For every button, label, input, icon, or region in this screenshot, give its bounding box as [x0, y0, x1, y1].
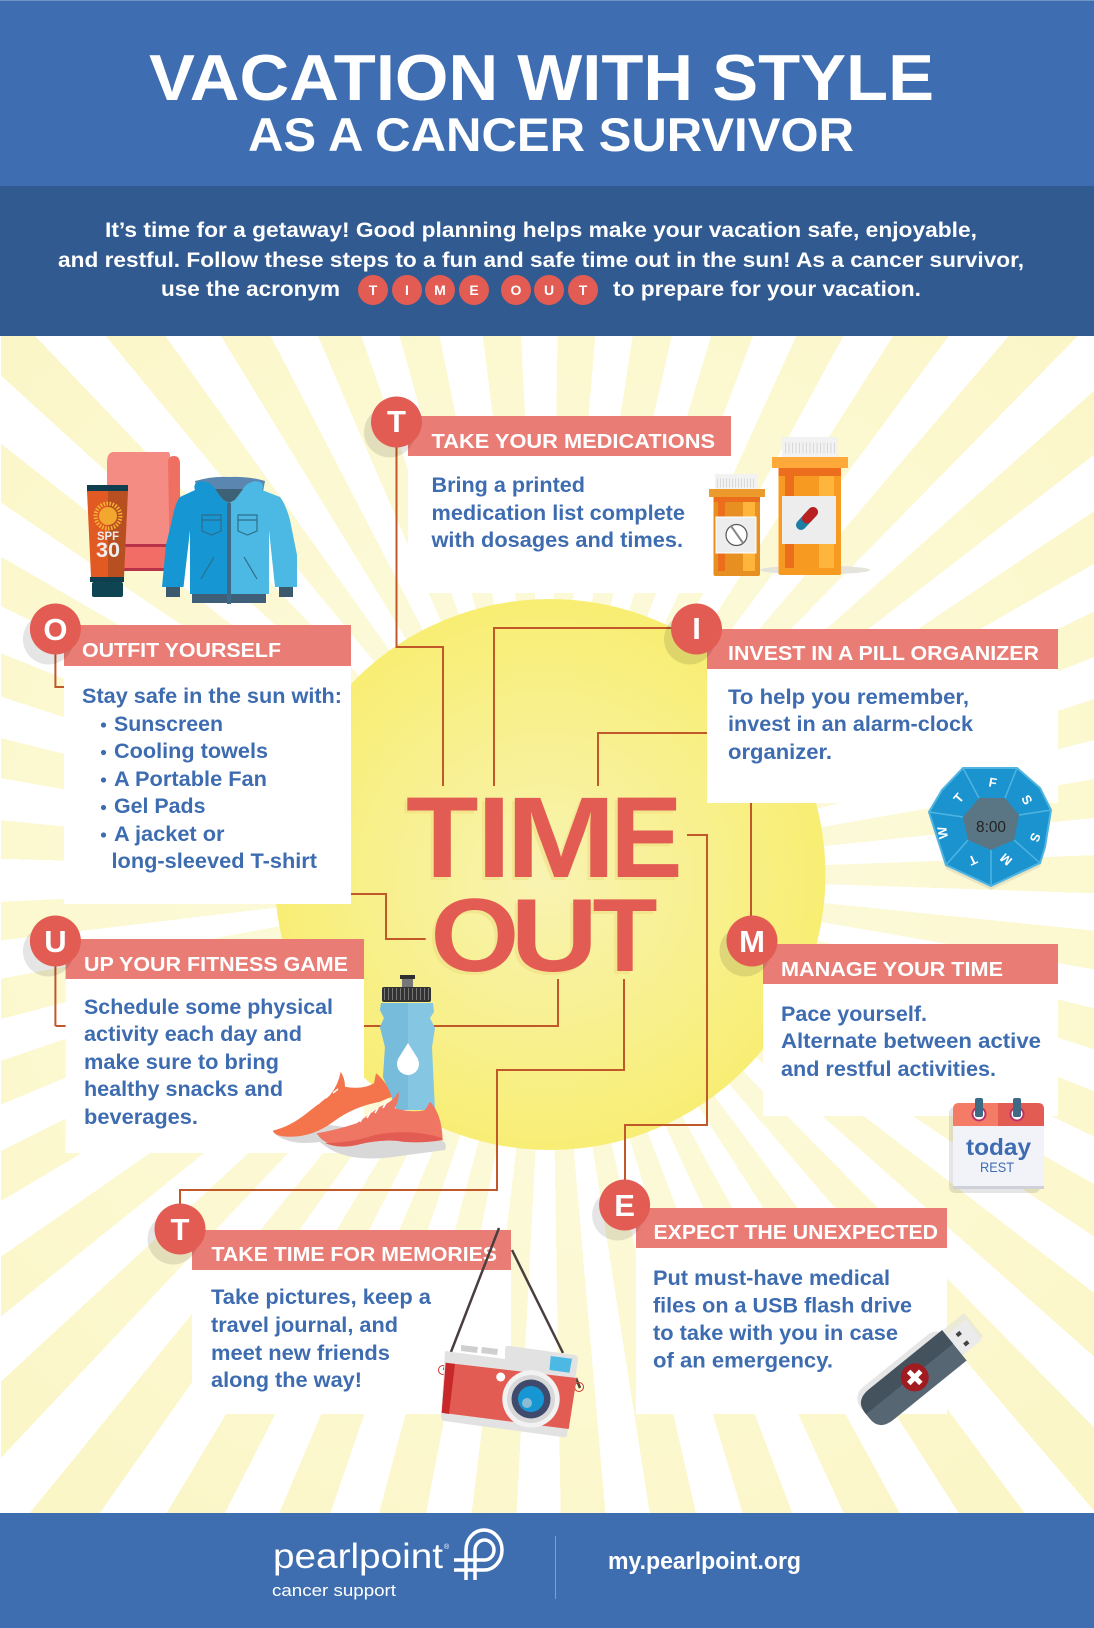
subtitle: AS A CANCER SURVIVOR [248, 108, 854, 161]
day labels [934, 774, 1044, 869]
icon: front shoe [317, 1092, 443, 1146]
headline text: E [610, 774, 682, 902]
body text: Bring a printed [432, 474, 585, 497]
logo wordmark: cancer support [272, 1581, 396, 1600]
body list [82, 685, 342, 873]
headline text: T [592, 878, 658, 994]
headline shadow: T [403, 777, 476, 905]
day labels: F [988, 774, 998, 791]
intro text: and restful. Follow these steps to a fun and safe time out in the sun! As a cancer survivor, [58, 249, 1024, 272]
icon: calendar: today [966, 1134, 1031, 1160]
day labels: S [1027, 831, 1044, 844]
body text: healthy snacks and [84, 1078, 283, 1101]
headline shadow: I [474, 777, 508, 905]
body text: travel journal, and [211, 1314, 398, 1337]
day labels: T [950, 790, 967, 806]
icon: USB drive [852, 1308, 988, 1431]
badge E [592, 1180, 650, 1240]
icon: calendar: REST [980, 1159, 1014, 1175]
body text [653, 1267, 912, 1372]
badge M: M [739, 924, 765, 959]
headline text: I [477, 774, 511, 902]
body text: and restful activities. [781, 1058, 996, 1081]
badge T [364, 396, 422, 458]
badge T: T [387, 404, 406, 439]
icon: camera [438, 1228, 584, 1437]
body text: Alternate between active [781, 1030, 1041, 1053]
heading: EXPECT THE UNEXPECTED [654, 1221, 938, 1244]
heading: TAKE TIME FOR MEMORIES [212, 1243, 497, 1266]
body text [211, 1286, 431, 1392]
body text: files on a USB flash drive [653, 1294, 912, 1318]
icon: calendar [949, 1098, 1044, 1193]
logo mark [454, 1530, 502, 1580]
day labels: W [934, 825, 951, 840]
headline shadow: M [503, 777, 613, 905]
acronym badges: M [434, 282, 446, 298]
icon: pill organizer [929, 768, 1051, 890]
headline shadow: T [590, 881, 654, 997]
badge T [148, 1204, 206, 1264]
logo wordmark [272, 1537, 450, 1600]
body text: along the way! [211, 1369, 362, 1392]
panel: up your fitness game [23, 916, 364, 1153]
icon: sunscreen tube [87, 485, 128, 597]
acronym badges: I [405, 282, 409, 298]
badge E: E [614, 1188, 635, 1223]
title: VACATION WITH STYLE [149, 41, 934, 114]
body text: with dosages and times. [430, 529, 683, 552]
icon: water bottle [380, 975, 435, 1110]
strap [444, 1228, 499, 1370]
panel: take your medications [364, 396, 731, 593]
panel: expect the unexpected [592, 1180, 947, 1414]
panel: outfit yourself [23, 604, 351, 904]
body text: activity each day and [84, 1023, 302, 1046]
body text: meet new friends [211, 1342, 390, 1365]
acronym badges: T [579, 282, 588, 298]
body text [781, 1003, 1041, 1081]
acronym badges: U [544, 282, 554, 298]
headline shadow: O [427, 881, 516, 997]
body text [728, 686, 973, 764]
panel: invest in a pill organizer [664, 604, 1058, 803]
website url: my.pearlpoint.org [608, 1548, 801, 1575]
headline text: O [430, 878, 519, 994]
body text: make sure to bring [84, 1051, 279, 1074]
icon: small bottle [709, 474, 765, 576]
body text: of an emergency. [653, 1350, 833, 1372]
body list: A jacket or [114, 823, 224, 846]
body list: A Portable Fan [114, 768, 267, 791]
intro text [58, 219, 1024, 301]
footer [0, 1513, 1094, 1628]
body text: Schedule some physical [84, 996, 333, 1019]
header banner [0, 0, 1094, 186]
intro text: use the acronym [161, 278, 340, 301]
acronym badges: O [511, 282, 522, 298]
body list: Stay safe in the sun with: [82, 685, 342, 708]
icon: water bottle and shoes [273, 975, 446, 1159]
headline text: U [510, 878, 598, 994]
TIME OUT headline [403, 774, 682, 997]
badge O: O [43, 612, 67, 647]
badge M [720, 916, 778, 976]
badge T: T [171, 1212, 190, 1247]
heading: OUTFIT YOURSELF [82, 639, 281, 662]
body text: To help you remember, [728, 686, 969, 709]
badge U [23, 916, 81, 976]
body text [430, 474, 685, 552]
body text: beverages. [84, 1106, 198, 1129]
connector lines [55, 440, 751, 1205]
body text: Pace yourself. [781, 1003, 927, 1026]
badge I [664, 604, 722, 664]
body text: Put must-have medical [653, 1267, 890, 1290]
icon: jacket [162, 477, 297, 604]
body text: invest in an alarm-clock [728, 713, 973, 736]
intro text: to prepare for your vacation. [613, 278, 921, 301]
logo wordmark: pearlpoint [273, 1537, 443, 1576]
body text: medication list complete [432, 502, 685, 525]
icon: sunscreen tube: 30 [96, 539, 120, 562]
badge I: I [692, 611, 701, 646]
heading: INVEST IN A PILL ORGANIZER [728, 642, 1039, 665]
panel: manage your time [720, 916, 1058, 1116]
logo wordmark: ® [444, 1543, 450, 1551]
body list: long-sleeved T-shirt [112, 850, 317, 873]
headline shadow: U [508, 881, 595, 997]
acronym badges [358, 275, 598, 305]
acronym badges: T [369, 282, 378, 298]
icon: towels, sunscreen and jacket [87, 452, 297, 604]
shoe shadows [275, 1125, 446, 1159]
day labels: S [1018, 792, 1036, 808]
headline shadow: E [608, 777, 680, 905]
intro text: It’s time for a getaway! Good planning helps make your vacation safe, enjoyable, [105, 219, 977, 242]
heading: MANAGE YOUR TIME [781, 958, 1003, 981]
heading: UP YOUR FITNESS GAME [84, 953, 348, 976]
background sun rays [1, 336, 1094, 1513]
body text: organizer. [728, 741, 832, 764]
headline text [406, 774, 682, 994]
badge U: U [44, 924, 67, 959]
body list: Gel Pads [114, 795, 206, 818]
headline shadow [403, 777, 680, 997]
intro band [0, 186, 1094, 336]
acronym badges: E [469, 282, 479, 298]
badge O [23, 604, 81, 664]
central sun [274, 599, 826, 1150]
day labels: T [966, 852, 980, 869]
body list: Cooling towels [114, 740, 268, 763]
body list: Sunscreen [114, 713, 223, 736]
icon: towels [107, 452, 180, 571]
icon: rear shoe [273, 1072, 392, 1137]
heading: TAKE YOUR MEDICATIONS [432, 430, 715, 453]
icon: pill organizer: 8:00 [976, 819, 1006, 836]
day labels: M [997, 850, 1015, 869]
body text [84, 996, 333, 1129]
icon: medicine bottles [709, 437, 870, 576]
headline text: M [506, 774, 616, 902]
panel: take time for memories [148, 1204, 511, 1414]
body text: Take pictures, keep a [211, 1286, 431, 1309]
icon: large bottle [772, 437, 848, 575]
icon: sunscreen tube: SPF [97, 529, 119, 543]
headline text: T [406, 774, 478, 902]
body text: to take with you in case [653, 1322, 898, 1345]
